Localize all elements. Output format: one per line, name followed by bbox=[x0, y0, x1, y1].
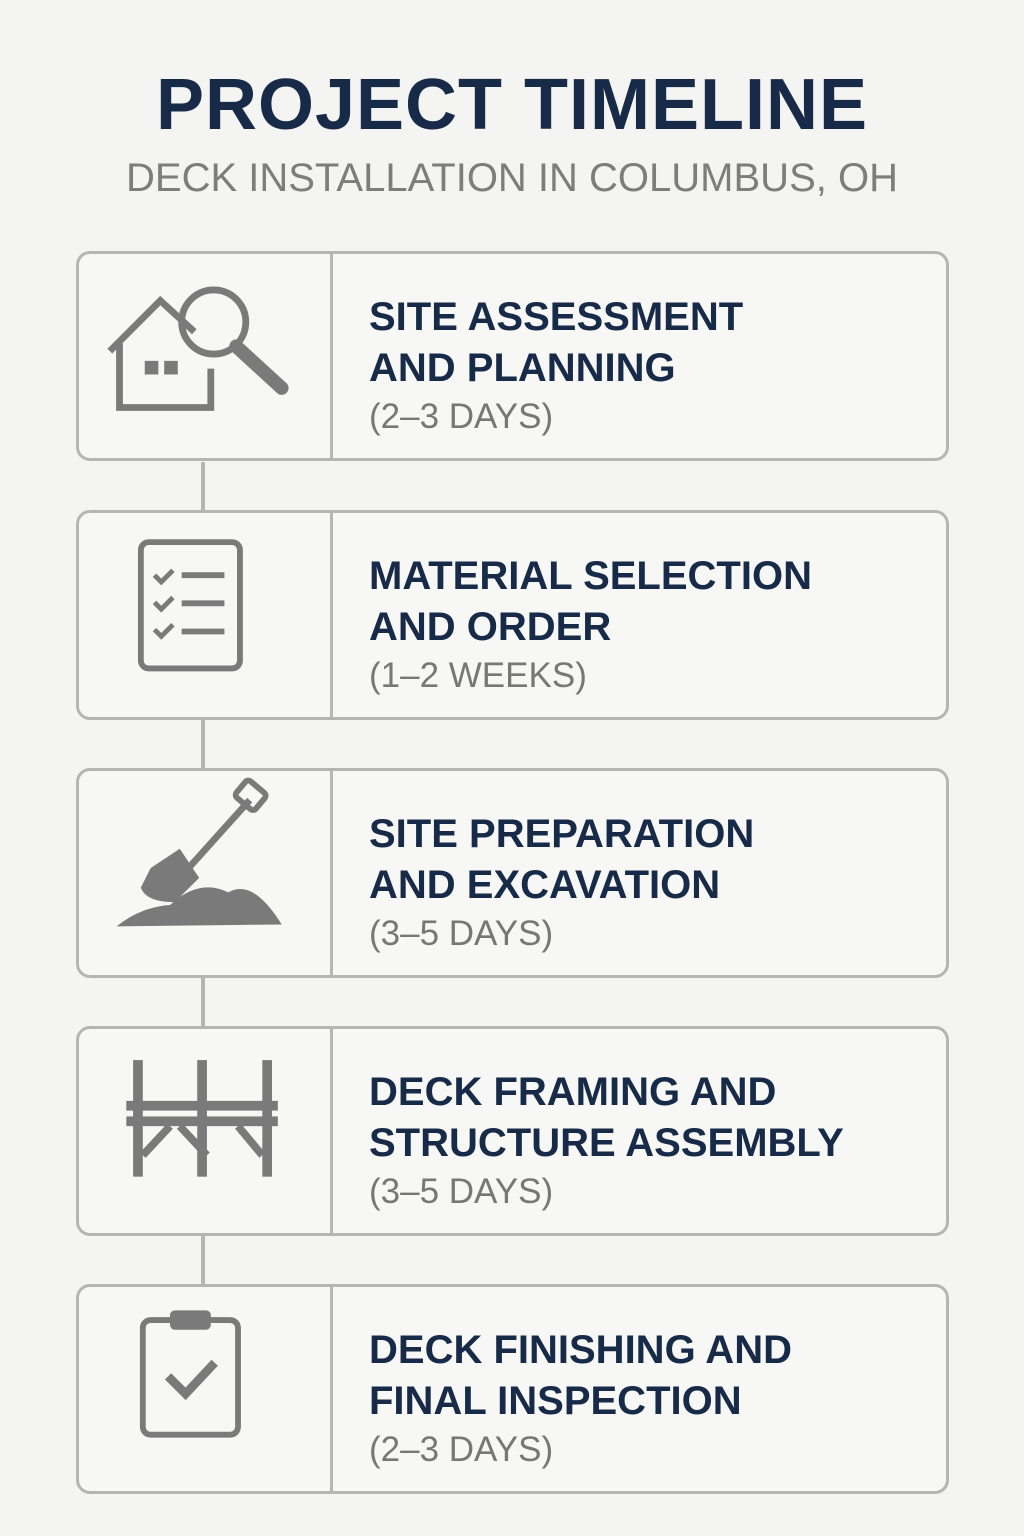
text bbox=[369, 295, 743, 436]
text bbox=[369, 812, 754, 953]
card 1: site assessment bbox=[76, 251, 949, 461]
card 5: finishing bbox=[76, 1284, 949, 1494]
text: MATERIAL SELECTION bbox=[369, 554, 812, 598]
subtitle: DECK INSTALLATION IN COLUMBUS, OH bbox=[126, 156, 898, 200]
text: (2–3 DAYS) bbox=[369, 1430, 553, 1469]
text: (3–5 DAYS) bbox=[369, 914, 553, 953]
text: (3–5 DAYS) bbox=[369, 1172, 553, 1211]
text bbox=[369, 1328, 792, 1469]
card 2: material selection bbox=[76, 510, 949, 720]
text bbox=[369, 554, 812, 695]
text: AND ORDER bbox=[369, 605, 611, 649]
icon: house with magnifier bbox=[108, 286, 288, 411]
icon: deck frame bbox=[126, 1060, 278, 1177]
text: AND EXCAVATION bbox=[369, 863, 720, 907]
text: AND PLANNING bbox=[369, 346, 676, 390]
card 3: site preparation bbox=[76, 768, 949, 978]
text: STRUCTURE ASSEMBLY bbox=[369, 1121, 844, 1165]
text: DECK FINISHING AND bbox=[369, 1328, 792, 1372]
icon: clipboard check bbox=[140, 1310, 241, 1438]
text: SITE ASSESSMENT bbox=[369, 295, 743, 339]
text: FINAL INSPECTION bbox=[369, 1379, 742, 1423]
icon: checklist bbox=[138, 539, 243, 672]
text bbox=[369, 1070, 844, 1211]
card 4: framing bbox=[76, 1026, 949, 1236]
text: (2–3 DAYS) bbox=[369, 397, 553, 436]
text: (1–2 WEEKS) bbox=[369, 656, 587, 695]
text: DECK FRAMING AND bbox=[369, 1070, 776, 1114]
text: SITE PREPARATION bbox=[369, 812, 754, 856]
title: PROJECT TIMELINE bbox=[156, 65, 868, 145]
icon: shovel and dirt bbox=[116, 778, 282, 926]
